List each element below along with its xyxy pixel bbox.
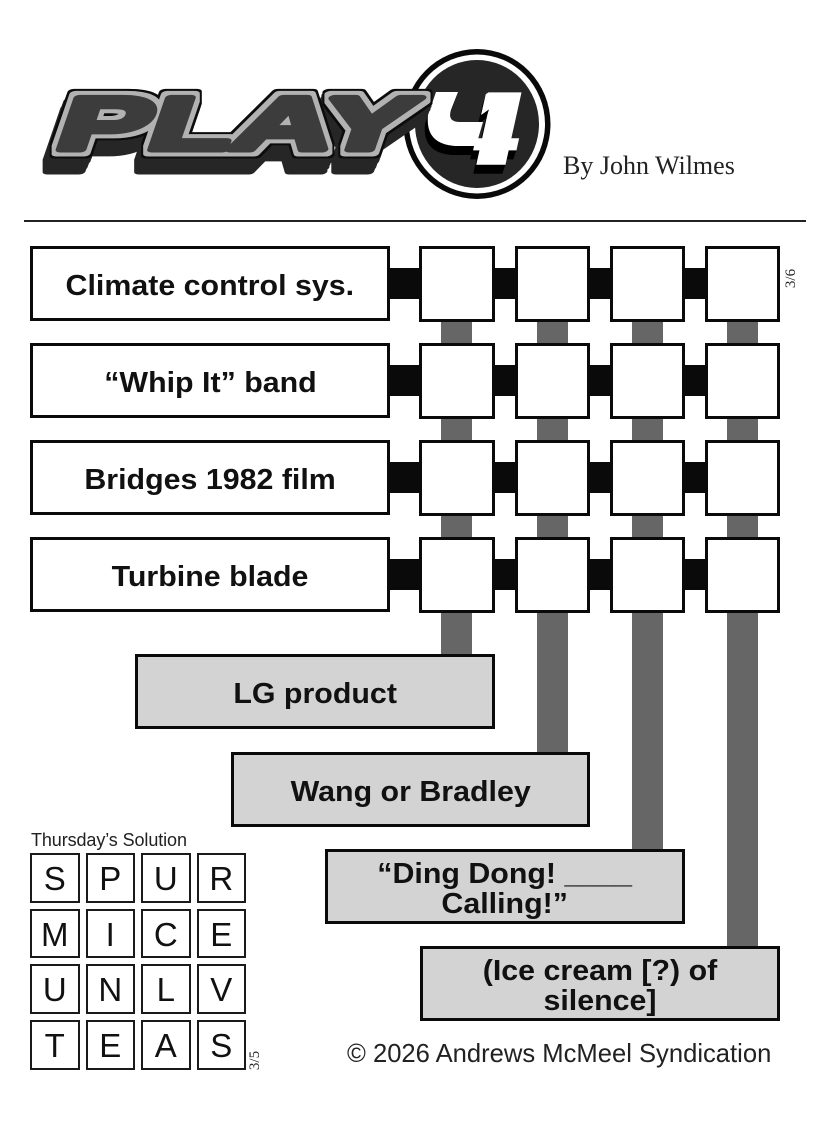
solution grid: I	[106, 916, 115, 952]
solution heading: Thursday’s Solution	[31, 830, 187, 850]
across clue 1	[30, 246, 390, 321]
puzzle row 3	[30, 440, 780, 516]
solution grid: R	[209, 860, 233, 897]
down clue 1	[135, 654, 494, 729]
solution grid: E	[210, 916, 232, 952]
solution grid: S	[44, 860, 66, 897]
down clue 4	[420, 946, 780, 1021]
solution grid: E	[99, 1027, 121, 1064]
divider rule	[24, 220, 806, 222]
byline: By John Wilmes	[563, 151, 735, 180]
solution grid: U	[154, 860, 178, 897]
down clue 4: (Ice cream [?) of	[483, 955, 717, 987]
copyright: © 2026 Andrews McMeel Syndication	[347, 1040, 771, 1068]
across clue 4	[30, 537, 390, 612]
across clue 3: Bridges 1982 film	[84, 464, 336, 496]
down clue 4: silence]	[543, 984, 657, 1016]
solution grid: N	[98, 971, 122, 1008]
solution grid: S	[210, 1027, 232, 1064]
across clue 2: “Whip It” band	[104, 367, 316, 399]
solution grid	[30, 853, 246, 1070]
down clue 3: Calling!”	[442, 888, 568, 920]
circle badge with 4: 4	[407, 71, 544, 186]
date code 3/5: 3/5	[247, 1051, 263, 1070]
solution grid: U	[43, 971, 67, 1008]
PLAY wordmark: PLAY	[46, 82, 429, 166]
solution grid: C	[154, 916, 178, 952]
across clue 1: Climate control sys.	[66, 270, 354, 302]
down clue 2: Wang or Bradley	[290, 776, 530, 808]
down clue 3: “Ding Dong! ____	[378, 858, 632, 890]
solution grid: V	[210, 971, 232, 1008]
date code 3/6: 3/6	[783, 269, 799, 288]
solution grid: T	[45, 1027, 65, 1064]
down clue 3	[325, 849, 685, 924]
puzzle row 1	[30, 246, 780, 322]
puzzle row 4	[30, 537, 780, 613]
solution grid: A	[155, 1027, 177, 1064]
solution grid: L	[157, 971, 175, 1008]
across clue 4: Turbine blade	[112, 561, 308, 593]
logo: PLAY 4	[42, 49, 550, 199]
solution grid: P	[99, 860, 121, 897]
across clue 2	[30, 343, 390, 418]
solution grid: M	[41, 916, 68, 952]
down clue 2	[230, 752, 590, 827]
down clue 1: LG product	[233, 678, 397, 710]
across clue 3	[30, 440, 390, 515]
puzzle row 2	[30, 343, 780, 419]
